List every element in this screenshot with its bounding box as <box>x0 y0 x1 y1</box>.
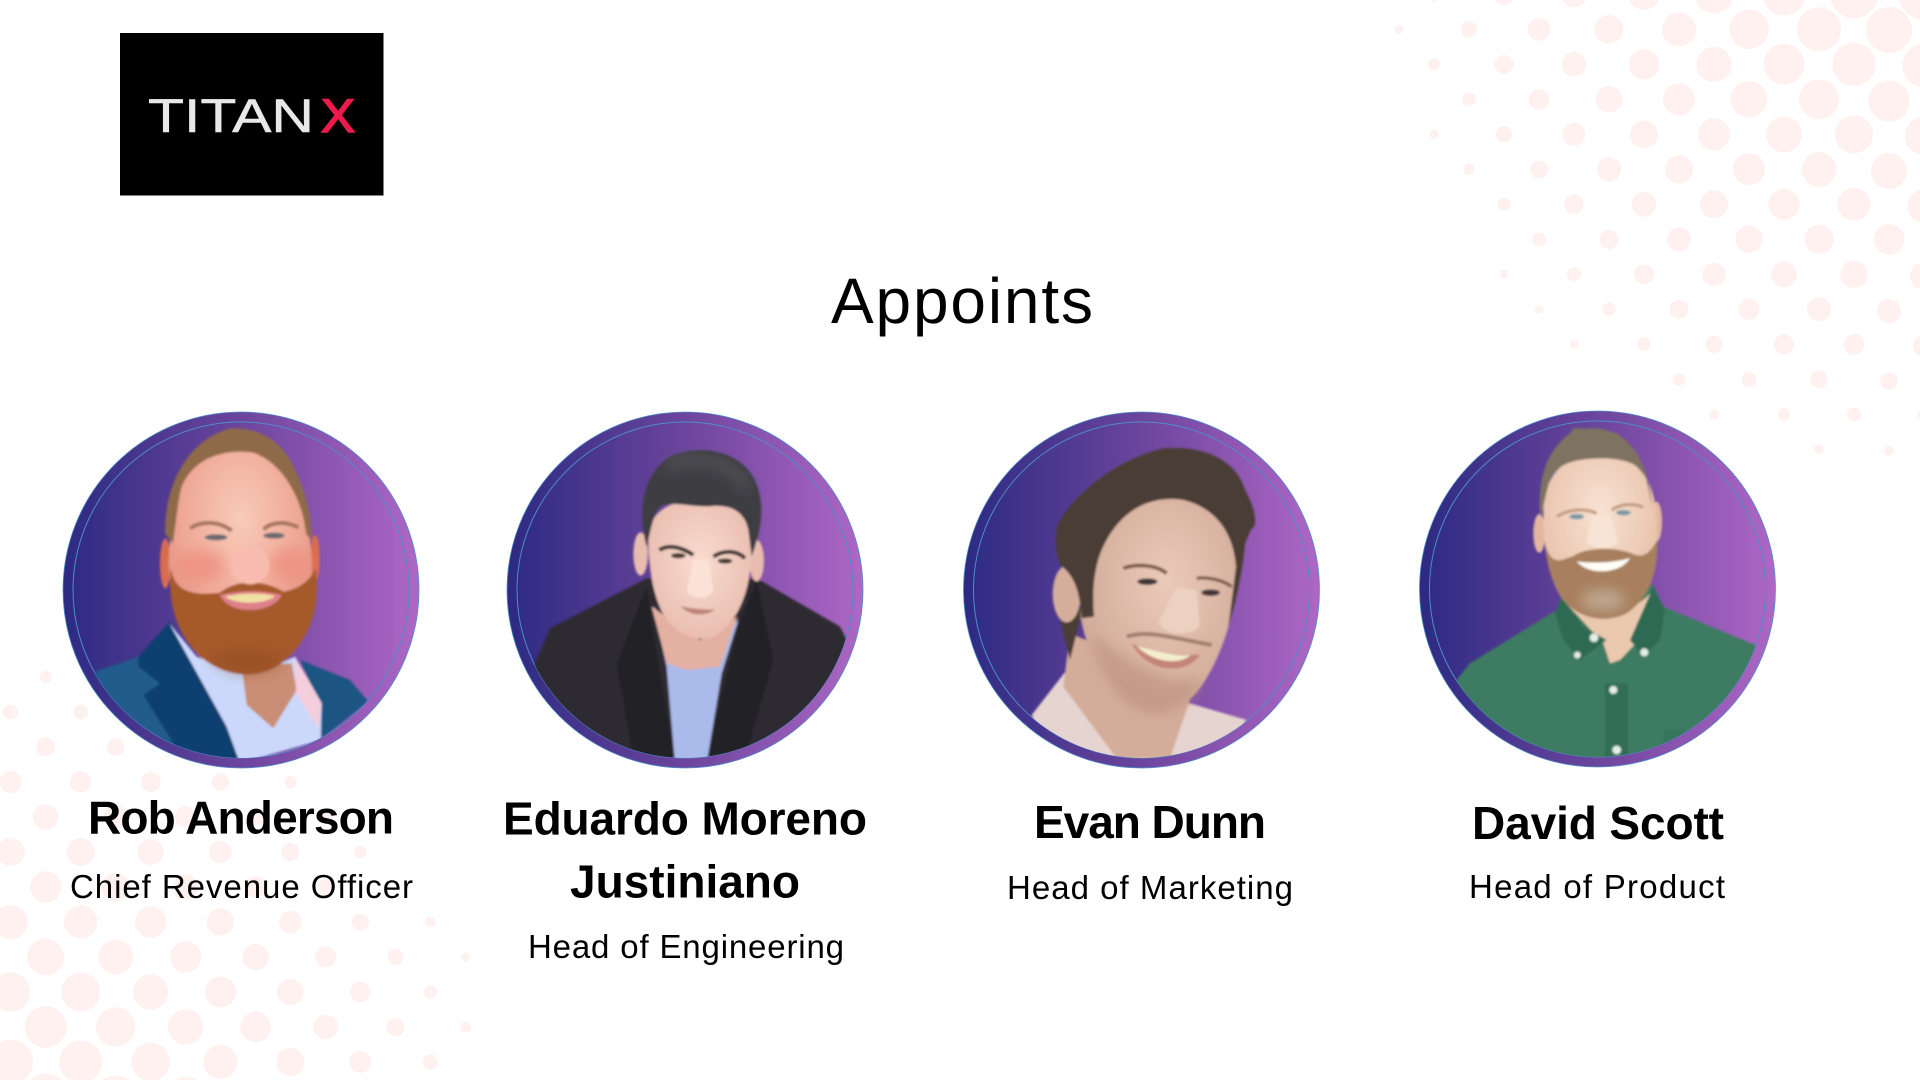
background halftone dots top right <box>1395 0 1920 456</box>
name second line: Justiniano <box>570 856 800 908</box>
logo: TitanX: X <box>321 89 355 142</box>
portrait badge: David Scott <box>1420 411 1776 767</box>
title: Appoints <box>831 265 1093 337</box>
name: Evan Dunn <box>1034 796 1266 848</box>
logo: TitanX: TITAN <box>148 89 314 142</box>
portrait badge: Eduardo Moreno Justiniano <box>507 412 863 768</box>
panel: Rob Anderson <box>63 412 419 905</box>
portrait badge: Rob Anderson <box>63 412 419 768</box>
panel: David Scott <box>1420 411 1776 905</box>
background halftone dots bottom left <box>0 671 471 1080</box>
role: Head of Engineering <box>528 928 844 965</box>
role: Head of Product <box>1469 868 1725 905</box>
panel: Eduardo Moreno Justiniano <box>503 412 867 965</box>
panel: Evan Dunn <box>964 412 1320 906</box>
role: Chief Revenue Officer <box>70 868 413 905</box>
name: Eduardo Moreno <box>503 792 867 844</box>
logo: TitanX <box>120 33 384 196</box>
name: David Scott <box>1472 797 1724 849</box>
name: Rob Anderson <box>88 792 394 844</box>
role: Head of Marketing <box>1007 869 1293 906</box>
portrait badge: Evan Dunn <box>964 412 1320 768</box>
